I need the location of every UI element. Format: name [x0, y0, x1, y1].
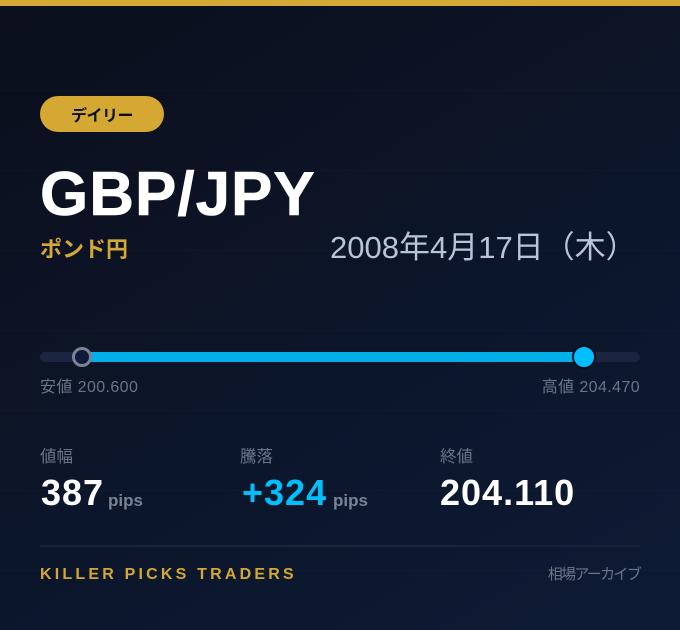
top gold bar — [0, 0, 680, 6]
value: +324 — [242, 472, 327, 513]
high marker — [572, 345, 596, 369]
low label: 安値 200.600 — [40, 379, 138, 396]
label: 値幅 — [40, 443, 73, 467]
unit: pips — [108, 491, 143, 510]
stat: close — [440, 443, 575, 513]
range bar — [40, 345, 640, 369]
badge: デイリー — [40, 96, 164, 132]
archive label: 相場アーカイブ — [548, 563, 640, 584]
title: GBP/JPY: GBP/JPY — [40, 160, 316, 229]
label: 騰落 — [240, 443, 273, 467]
low marker — [72, 347, 92, 367]
range fill — [82, 352, 584, 362]
stat: change — [240, 443, 368, 513]
range track — [40, 352, 640, 362]
high label: 高値 204.470 — [542, 379, 640, 396]
stat: range — [40, 443, 143, 513]
brand: KILLER PICKS TRADERS — [40, 566, 297, 583]
value: 204.110 — [440, 472, 575, 513]
date: 2008年4月17日（木） — [330, 230, 637, 265]
label: 終値 — [440, 443, 473, 467]
subtitle: ポンド円: ポンド円 — [40, 232, 128, 264]
value: 387 — [41, 472, 104, 513]
unit: pips — [333, 491, 368, 510]
badge: デイリー: デイリー — [71, 102, 133, 126]
